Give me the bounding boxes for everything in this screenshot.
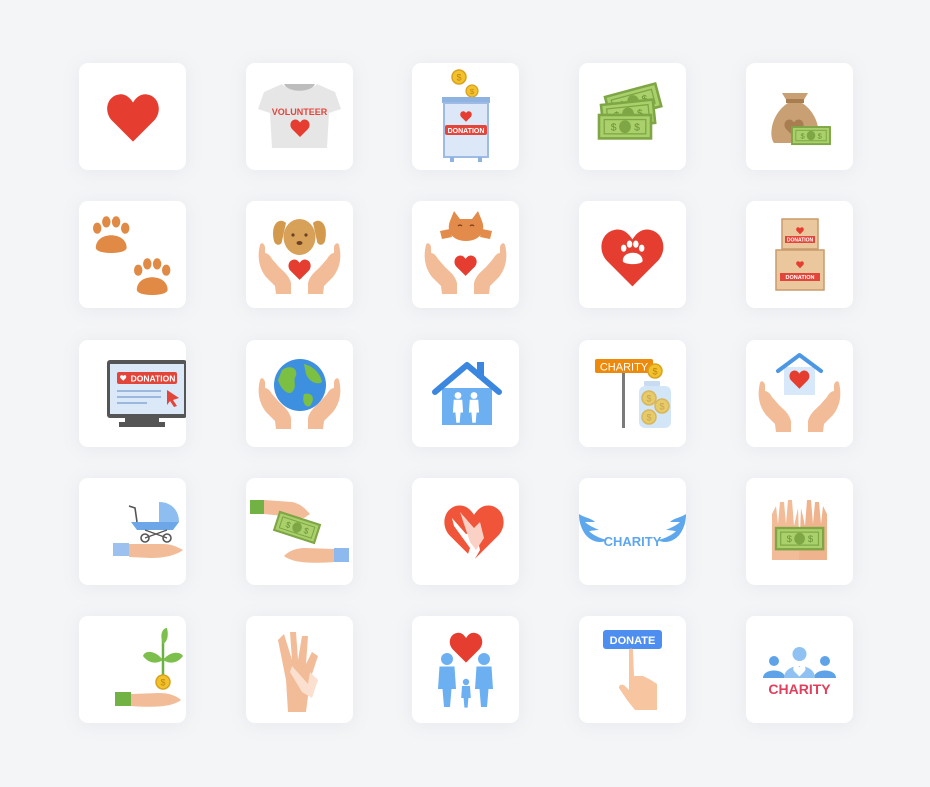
icon: globe with hands [259, 359, 340, 429]
card: donation boxes [746, 201, 853, 308]
icon: charity wings logo: CHARITY [604, 534, 662, 549]
icon: stacked boxes [776, 219, 824, 290]
card: volunteer t-shirt [246, 63, 353, 170]
card: globe in hands [246, 340, 353, 447]
card: donation box [412, 63, 519, 170]
icon: money sack [771, 93, 830, 144]
icon: helping hands [278, 632, 318, 712]
icon: family with heart [438, 633, 493, 708]
card: paws [79, 201, 186, 308]
icon: giving money [250, 500, 349, 563]
card: family heart [412, 616, 519, 723]
card: house heart in hands [746, 340, 853, 447]
card: donate button [579, 616, 686, 723]
card: family house [412, 340, 519, 447]
card: hand to hand money [246, 478, 353, 585]
icon: charity sign and jar: CHARITY [600, 362, 649, 374]
card: charity wings [579, 478, 686, 585]
card: charity people [746, 616, 853, 723]
icon: cat with hands [425, 211, 506, 294]
icon: hands with bill [772, 500, 827, 560]
icon: donate button and finger: DONATE [610, 635, 655, 647]
icon: heart [107, 94, 159, 142]
icon: stacked boxes: DONATION [786, 275, 814, 281]
icon: monitor: DONATION [131, 374, 175, 384]
icon: donation box: DONATION [448, 128, 484, 135]
card: hands holding bill [746, 478, 853, 585]
icon: paw prints [93, 216, 170, 295]
card: money sack [746, 63, 853, 170]
card: heart with hands [412, 478, 519, 585]
icon: stacked boxes: DONATION [787, 238, 814, 244]
icon: heart with paw [601, 230, 663, 286]
card: money bills [579, 63, 686, 170]
icon: heart and hands [444, 505, 504, 564]
card: cat in hands [412, 201, 519, 308]
card: two hands [246, 616, 353, 723]
card: dog in hands [246, 201, 353, 308]
icon: t-shirt: VOLUNTEER [272, 107, 328, 117]
card: charity sign and jar [579, 340, 686, 447]
icon: stack of bills [599, 84, 661, 138]
icon: dog with hands [259, 219, 340, 294]
card: heart [79, 63, 186, 170]
icon: charity people: CHARITY [768, 681, 831, 697]
card: paw heart [579, 201, 686, 308]
card: online donation [79, 340, 186, 447]
card: plant and coin [79, 616, 186, 723]
icon: house heart hands [759, 355, 840, 432]
icon: house with family [435, 362, 499, 425]
icon: plant growing from hand [115, 628, 183, 707]
icon: stroller and hand [113, 502, 183, 558]
card: stroller in hand [79, 478, 186, 585]
